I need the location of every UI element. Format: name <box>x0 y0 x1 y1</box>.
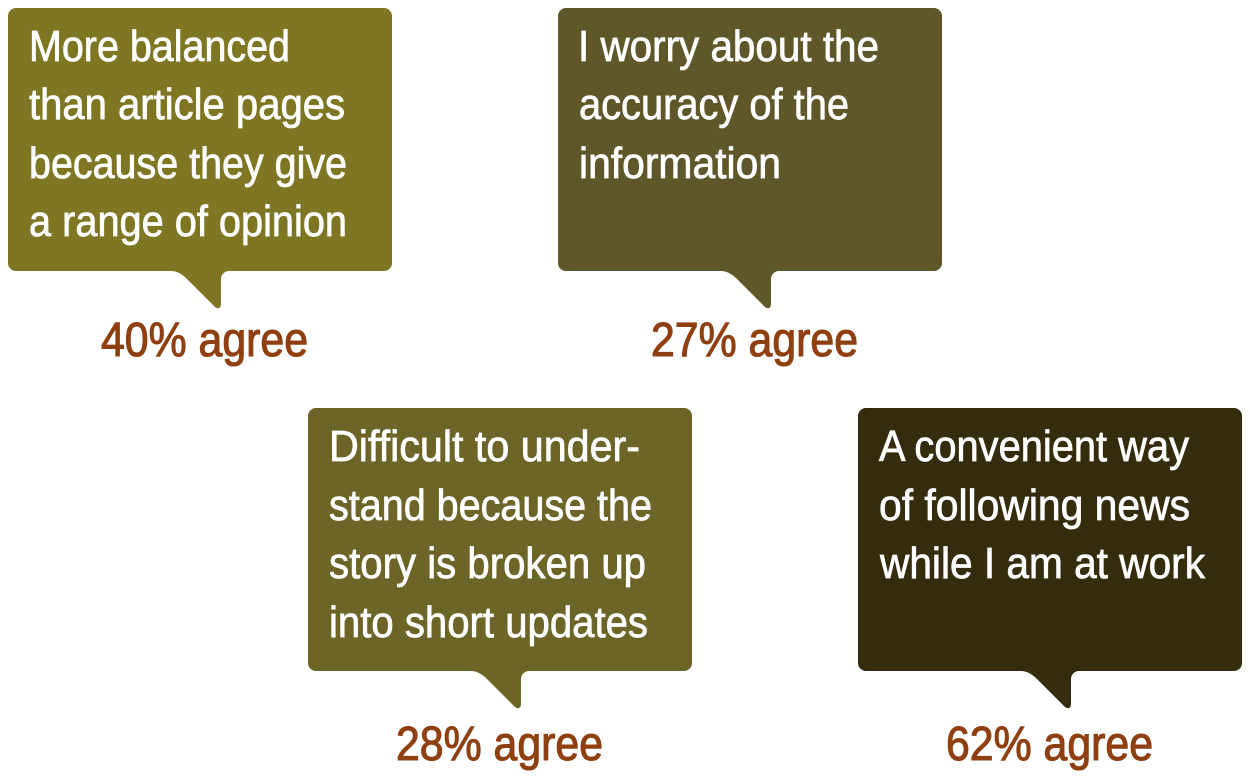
bubble text: while I am at work <box>879 539 1206 588</box>
bubble text: into short updates <box>329 598 648 647</box>
agreement figure: 28% agree <box>396 718 603 771</box>
bubble text: More balanced <box>29 22 290 71</box>
bubble text: of following news <box>879 481 1190 530</box>
bubble text: than article pages <box>29 80 345 129</box>
bubble text: information <box>579 139 781 188</box>
bubble text <box>578 22 879 188</box>
speech bubble: medium brown <box>558 8 942 308</box>
bubble text <box>879 422 1206 588</box>
speech bubble: dark olive <box>308 408 692 708</box>
agreement figure: 40% agree <box>101 314 308 367</box>
bubble text <box>329 422 652 647</box>
agreement figure: 62% agree <box>946 718 1153 771</box>
bubble text: because they give <box>29 139 347 188</box>
bubble text: I worry about the <box>578 22 879 71</box>
bubble text: story is broken up <box>329 539 646 588</box>
panel: convenient at work, 62% agree <box>858 408 1242 771</box>
bubble text: Difficult to under- <box>329 422 640 471</box>
agreement figure: 27% agree <box>651 314 858 367</box>
speech bubble: olive <box>8 8 392 308</box>
bubble text: accuracy of the <box>579 80 849 129</box>
bubble text: A convenient way <box>879 422 1189 471</box>
bubble text <box>29 22 347 246</box>
bubble text: stand because the <box>329 481 652 530</box>
speech bubble: darkest brown <box>858 408 1242 708</box>
panel: more balanced, 40% agree <box>8 8 392 367</box>
panel: accuracy worry, 27% agree <box>558 8 942 367</box>
panel: difficult to understand, 28% agree <box>308 408 692 771</box>
bubble text: a range of opinion <box>29 197 347 246</box>
